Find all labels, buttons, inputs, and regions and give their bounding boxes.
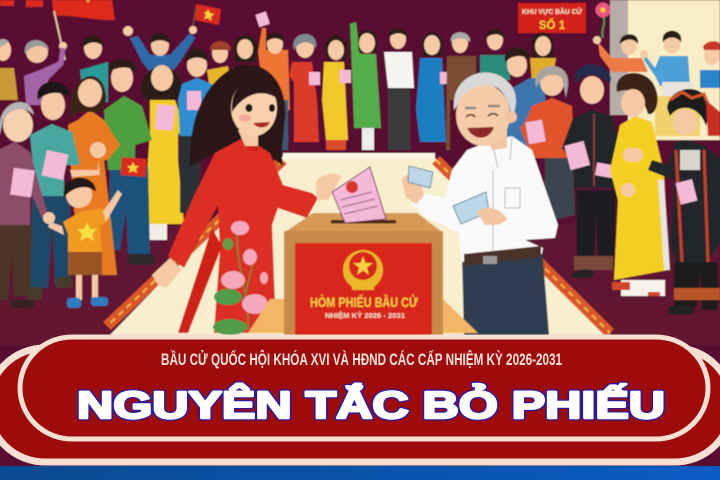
person: woman ethnic dress — [629, 89, 720, 315]
hands and ID cards — [402, 166, 507, 225]
person: child — [48, 178, 122, 308]
person: man blue shirt — [502, 48, 546, 155]
shirt — [412, 136, 558, 262]
person: man teal back — [480, 29, 510, 80]
pillar — [610, 0, 628, 115]
title banner — [0, 337, 720, 462]
person: man teal tshirt — [28, 82, 100, 300]
face — [231, 78, 279, 146]
front right crowd — [520, 64, 720, 315]
red ao dai — [168, 138, 318, 333]
person: woman yellow ao dai — [322, 36, 351, 150]
belt — [464, 246, 541, 266]
person: woman red ao dai — [289, 34, 320, 142]
person: woman yellow blouse — [530, 32, 556, 82]
small flag — [120, 157, 147, 177]
person: man in blue raising arms — [123, 26, 197, 72]
ballot box — [284, 167, 443, 335]
ballot paper — [332, 167, 386, 223]
trousers — [462, 246, 549, 335]
sign: polling area — [518, 3, 586, 33]
person: woman yellow ao dai — [610, 73, 670, 296]
red panel — [295, 243, 432, 335]
flower — [596, 2, 610, 38]
front left crowd — [0, 48, 216, 308]
hands — [152, 258, 182, 288]
woman casting a ballot — [152, 65, 342, 335]
elderly man with ID cards — [402, 72, 558, 335]
person: woman headscarf — [207, 41, 232, 90]
back wall on the right — [628, 0, 720, 140]
person: man orange — [255, 11, 290, 150]
flags at top left — [0, 0, 221, 60]
person: grandmother — [0, 102, 55, 308]
person: man yellow shirt — [0, 39, 18, 100]
long hair — [190, 65, 285, 167]
lid — [285, 213, 442, 232]
person: woman green — [232, 35, 258, 76]
bottom blue band — [0, 466, 720, 480]
person: man black ethnic — [562, 64, 623, 278]
box text: NHIỆM KỲ 2026 - 2031 — [325, 311, 405, 320]
person: woman yellow ao dai — [140, 65, 186, 240]
box front — [284, 231, 443, 335]
floor — [0, 150, 720, 345]
box text — [310, 293, 418, 320]
person: man green polo — [104, 59, 154, 265]
back row crowd — [0, 11, 556, 155]
carpet — [107, 153, 610, 335]
person: man white shirt — [384, 28, 414, 150]
sign: polling area: KHU VỰC BẦU CỬ — [522, 6, 583, 16]
main title: NGUYÊN TẮC BỎ PHIẾU — [77, 383, 665, 427]
person: old man brown — [446, 32, 476, 150]
person: woman green ao dai — [350, 22, 381, 150]
person: old woman orange blouse — [520, 66, 575, 222]
front pill — [20, 337, 708, 439]
person: man teal — [80, 36, 108, 102]
table — [248, 299, 478, 333]
person: old woman purple — [24, 40, 67, 105]
back right people — [593, 31, 720, 136]
box text: HÒM PHIẾU BẦU CỬ — [310, 293, 418, 310]
lotus embroidery — [213, 221, 268, 335]
sign: polling area: SỐ 1 — [539, 18, 566, 32]
person: woman orange ao dai — [68, 76, 120, 275]
head — [454, 72, 517, 150]
emblem — [343, 250, 383, 290]
back pill — [0, 348, 720, 462]
main title: NGUYÊN TẮC BỎ PHIẾU — [77, 383, 665, 427]
person: man blue tshirt — [178, 48, 216, 213]
person: woman blue ao dai — [416, 32, 450, 142]
